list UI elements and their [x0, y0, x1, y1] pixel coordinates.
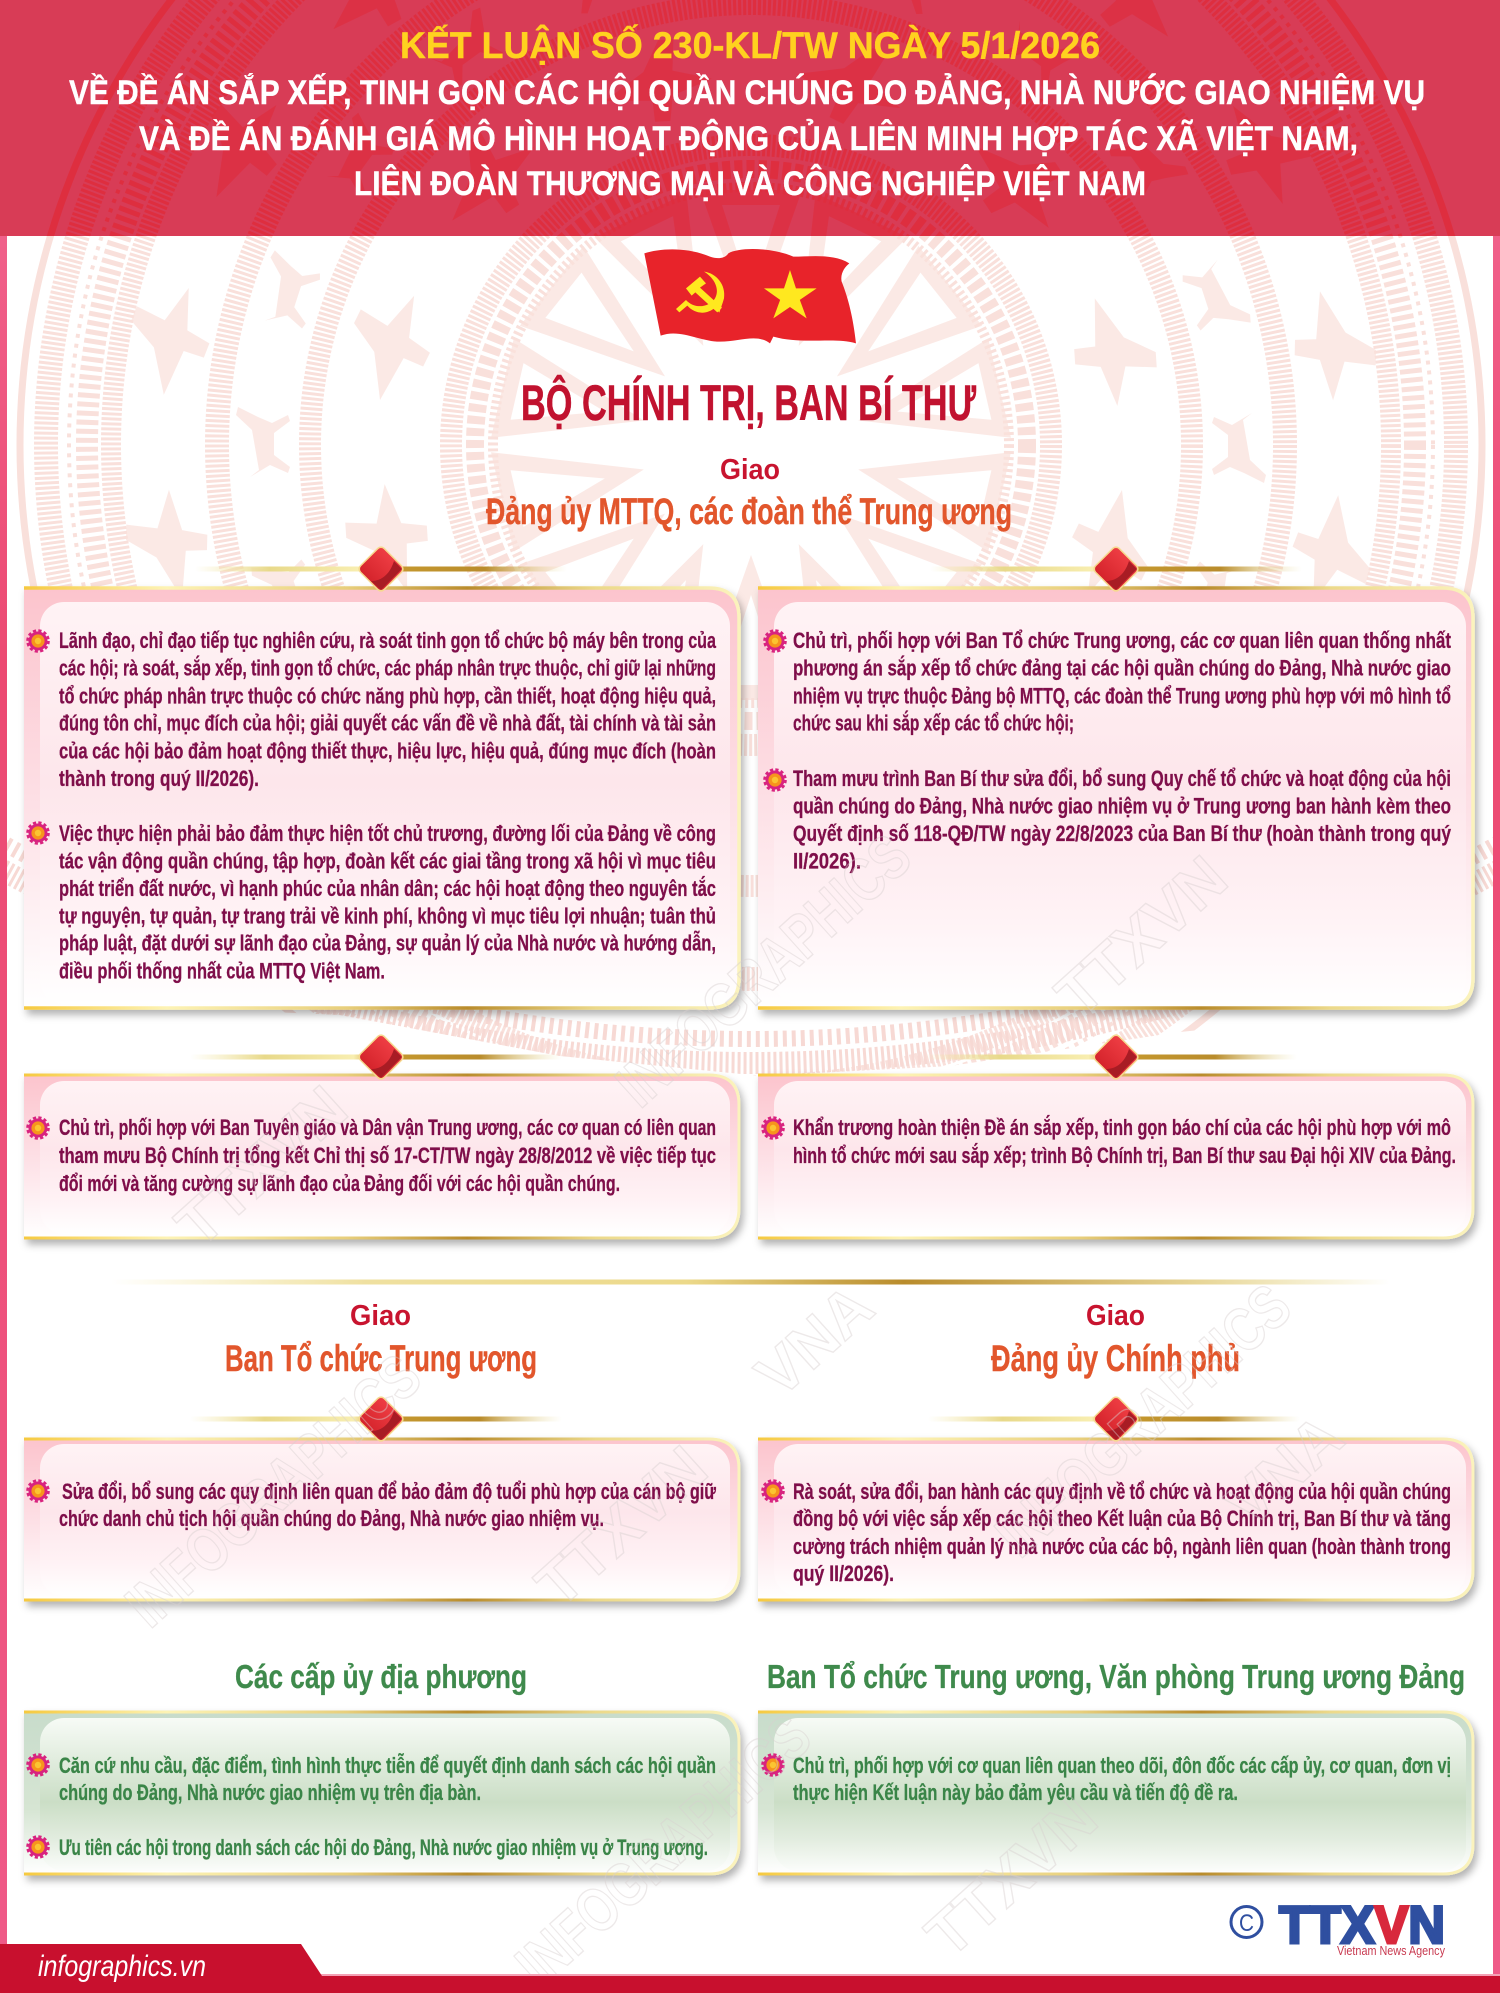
panel: local committees task	[24, 1712, 739, 1874]
panel: government committee task	[758, 1394, 1473, 1600]
diamond marker	[1091, 544, 1141, 594]
card inner	[774, 1718, 1466, 1871]
divider with diamond	[190, 1416, 562, 1422]
paragraph 1	[59, 1753, 716, 1805]
paragraph: Chủ trì, phối hợp với Ban Tuyên giáo và Dân vận Trung ương, các cơ quan có liên quan	[59, 1115, 716, 1140]
watermarks: TTXVN	[913, 1783, 1110, 1970]
panel: front committee task row 2 right	[758, 1032, 1473, 1238]
paragraph	[793, 1753, 1451, 1805]
card background	[24, 588, 739, 1008]
watermarks: INFOGRAPHICS	[113, 1342, 434, 1640]
panel: front committee task right	[758, 544, 1473, 1008]
bullet flower	[764, 770, 786, 790]
paragraph: Sửa đổi, bổ sung các quy định liên quan để bảo đảm độ tuổi phù hợp của cán bộ giữ	[62, 1479, 717, 1504]
watermarks: INFOGRAPHICS	[983, 1272, 1304, 1570]
paragraph: chức danh chủ tịch hội quần chúng do Đảng, Nhà nước giao nhiệm vụ.	[59, 1506, 604, 1531]
long gold divider	[111, 1280, 1390, 1284]
paragraph: đổi mới và tăng cường sự lãnh đạo của Đảng đối với các hội quần chúng.	[59, 1171, 620, 1196]
paragraph 2: II/2026).	[793, 848, 861, 873]
watermarks: INFOGRAPHICS	[503, 1702, 824, 1993]
divider with diamond	[928, 1416, 1300, 1422]
watermarks: TTXVN	[163, 1073, 360, 1260]
paragraph: tham mưu Bộ Chính trị tổng kết Chỉ thị số 17-CT/TW ngày 28/8/2012 về việc tiếp tục	[59, 1143, 716, 1168]
paragraph 1: chúng do Đảng, Nhà nước giao nhiệm vụ trên địa bàn.	[59, 1780, 481, 1805]
panel: central organization and party office task	[758, 1712, 1473, 1874]
label: assigned left: Giao	[350, 1300, 411, 1332]
footer bar	[0, 1944, 1500, 1993]
card inner	[774, 1444, 1466, 1596]
heading: Politburo and Secretariat: BỘ CHÍNH TRỊ, BAN BÍ THƯ	[521, 374, 976, 431]
diamond marker	[356, 544, 406, 594]
paragraph 2	[793, 766, 1451, 873]
divider with diamond	[195, 566, 567, 572]
divider with diamond	[190, 1054, 562, 1060]
copyright mark: C	[1239, 1910, 1254, 1937]
panel: organization commission task	[24, 1394, 739, 1600]
paragraph 1: thành trong quý II/2026).	[59, 766, 259, 791]
watermarks: TTXVN	[1043, 843, 1240, 1030]
divider with diamond	[930, 566, 1302, 572]
watermarks	[113, 822, 1357, 1993]
paragraph 1: của các hội bảo đảm hoạt động thiết thực, hiệu lực, hiệu quả, đúng mục đích (hoàn	[59, 738, 716, 763]
diamond marker	[1091, 1032, 1141, 1082]
website label: infographics.vn	[38, 1950, 206, 1983]
bullet flower	[762, 1754, 784, 1776]
watermarks: VNA	[743, 1272, 887, 1410]
panel: front committee task row 2 left	[24, 1032, 739, 1238]
label: assigned right: Giao	[1086, 1300, 1145, 1332]
paragraph 2: Việc thực hiện phải bảo đảm thực hiện tốt chủ trương, đường lối của Đảng về công	[59, 821, 716, 846]
title line 3: VÀ ĐỀ ÁN ĐÁNH GIÁ MÔ HÌNH HOẠT ĐỘNG CỦA LIÊN MINH HỢP TÁC XÃ VIỆT NAM,	[139, 119, 1358, 158]
logo: TTXVN	[1231, 1896, 1445, 1958]
bullet flower	[28, 1480, 48, 1502]
paragraph 2: tác vận động quần chúng, tập hợp, đoàn kết các giai tầng trong xã hội vì mục tiêu	[59, 848, 716, 873]
paragraph 1: đúng tôn chỉ, mục đích của hội; giải quyết các vấn đề về nhà đất, tài chính và tài sản	[59, 711, 716, 736]
watermarks: VNA	[1213, 1402, 1357, 1540]
copyright mark	[1231, 1906, 1262, 1938]
diamond marker	[356, 1394, 406, 1444]
bullet flower	[762, 1118, 784, 1138]
heading: local party committees: Các cấp ủy địa phương	[235, 1658, 527, 1695]
agency name: Vietnam News Agency	[1337, 1943, 1445, 1958]
paragraph 1	[793, 628, 1451, 736]
card inner	[40, 1718, 730, 1871]
bullet flower	[762, 1480, 784, 1502]
label: assigned: Giao	[720, 454, 780, 486]
diamond marker	[356, 1032, 406, 1082]
card background	[24, 1075, 739, 1238]
bullet flower	[28, 1754, 48, 1776]
header band	[0, 0, 1500, 236]
bullet flower	[28, 1836, 48, 1858]
paragraph 1: tổ chức pháp nhân trực thuộc có chức năng phù hợp, cần thiết, hoạt động hiệu quả,	[59, 683, 716, 708]
title line 4: LIÊN ĐOÀN THƯƠNG MẠI VÀ CÔNG NGHIỆP VIỆT NAM	[354, 164, 1146, 203]
paragraph 1: các hội; rà soát, sắp xếp, tinh gọn tổ chức, các pháp nhân trực thuộc, chỉ giữ lại những	[59, 656, 716, 681]
card inner	[40, 1444, 730, 1596]
heading: Central Organization Commission: Ban Tổ chức Trung ương	[225, 1338, 537, 1379]
icon: party flag	[644, 249, 856, 343]
card background	[758, 588, 1473, 1008]
watermarks: INFOGRAPHICS	[603, 822, 924, 1120]
card background	[758, 1075, 1473, 1238]
paragraph 2: Ưu tiên các hội trong danh sách các hội do Đảng, Nhà nước giao nhiệm vụ ở Trung ương.	[59, 1835, 708, 1860]
bullet flower	[764, 630, 786, 652]
title	[69, 24, 1425, 203]
card background	[758, 1712, 1473, 1874]
panel: front committee task left	[24, 544, 739, 1008]
card background	[758, 1439, 1473, 1600]
card background	[24, 1439, 739, 1600]
paragraph 1	[59, 628, 716, 791]
paragraph	[59, 1479, 717, 1531]
paragraph: thực hiện Kết luận này bảo đảm yêu cầu và tiến độ đề ra.	[793, 1780, 1238, 1805]
bullet flower	[28, 1118, 48, 1138]
paragraph 2: phát triển đất nước, vì hạnh phúc của nhân dân; các hội hoạt động theo nguyên tắc	[59, 876, 716, 901]
paragraph 2: điều phối thống nhất của MTTQ Việt Nam.	[59, 958, 385, 983]
card background	[24, 1712, 739, 1874]
card inner	[40, 602, 730, 1004]
bullet flower	[28, 822, 48, 844]
paragraph: quý II/2026).	[793, 1561, 894, 1586]
paragraph	[793, 1479, 1451, 1586]
paragraph 2	[59, 821, 716, 983]
paragraph 1: chức sau khi sắp xếp các tổ chức hội;	[793, 711, 1074, 736]
agency wordmark: TTXVN	[1279, 1896, 1445, 1955]
paragraph 2: tự nguyện, tự quản, tự trang trải về kinh phí, không vì mục tiêu lợi nhuận; tuân thủ	[59, 903, 716, 928]
paragraph 1: Căn cứ nhu cầu, đặc điểm, tình hình thực tiễn để quyết định danh sách các hội quần	[59, 1753, 716, 1778]
paragraph	[59, 1115, 716, 1196]
divider with diamond	[925, 1054, 1297, 1060]
bronze drum background pattern	[7, 236, 1493, 1076]
card inner	[774, 602, 1466, 1004]
heading: Government Party Committee: Đảng ủy Chính phủ	[991, 1338, 1240, 1379]
title line: conclusion number: KẾT LUẬN SỐ 230-KL/TW NGÀY 5/1/2026	[400, 24, 1100, 66]
paragraph	[793, 1115, 1456, 1168]
card inner	[40, 1081, 730, 1234]
watermarks: TTXVN	[523, 1433, 720, 1620]
paragraph 1: Lãnh đạo, chỉ đạo tiếp tục nghiên cứu, rà soát tinh gọn tổ chức bộ máy bên trong của	[59, 628, 716, 653]
diamond marker	[1091, 1394, 1141, 1444]
paragraph 2: pháp luật, đặt dưới sự lãnh đạo của Đảng, sự quản lý của Nhà nước và hướng dẫn,	[59, 931, 716, 956]
card inner	[774, 1081, 1466, 1234]
bullet flower	[28, 630, 48, 652]
heading: party committee of the Fatherland Front: Đảng ủy MTTQ, các đoàn thể Trung ương	[486, 491, 1012, 532]
